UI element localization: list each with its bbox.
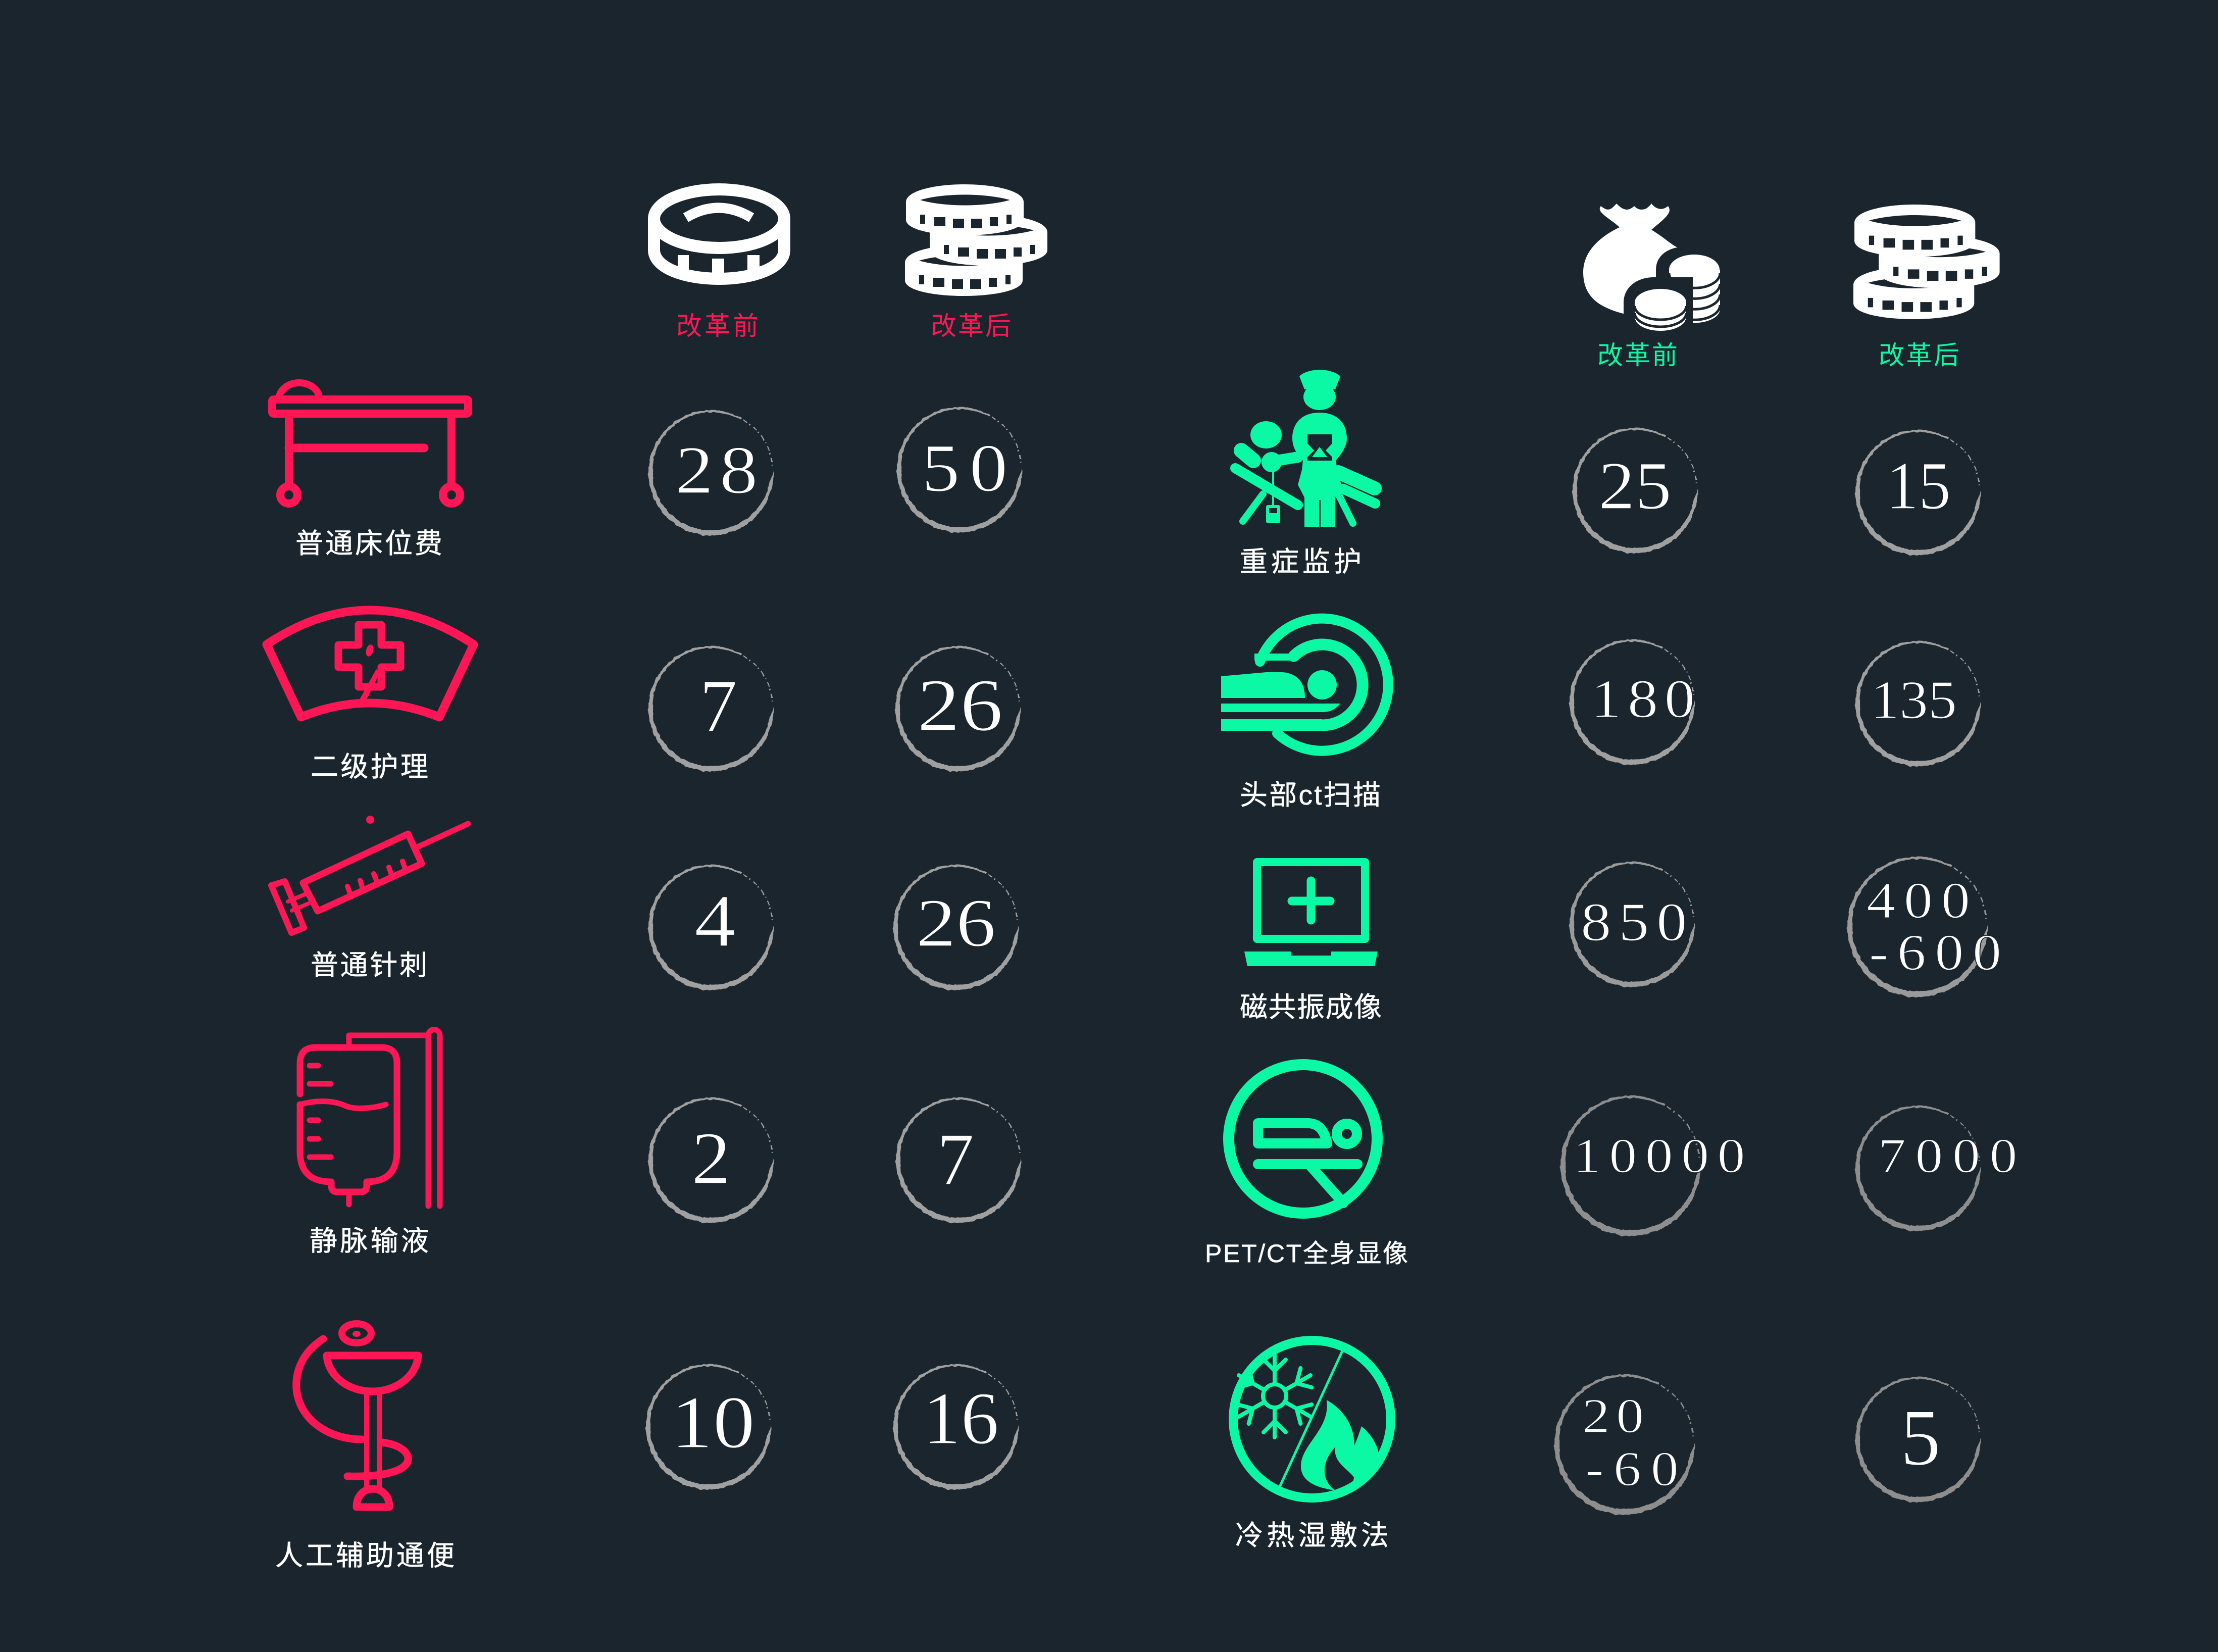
value: PET/CT after (1855, 1106, 2018, 1231)
value: head CT after: 135 (1871, 670, 1957, 730)
value: intensive care before (1573, 428, 1698, 553)
value: head CT before: 180 (1591, 669, 1695, 729)
value: intensive care before: 25 (1598, 448, 1672, 524)
icon: nurse with patient (1235, 370, 1375, 528)
value: infusion after: 7 (937, 1118, 974, 1201)
icon: money bag and coins (1583, 204, 1727, 334)
value: injection before (648, 865, 774, 990)
value: PET/CT before (1560, 1095, 1745, 1236)
value: injection after (893, 865, 1019, 990)
value: defecation before (646, 1364, 771, 1489)
value: head CT before (1570, 639, 1695, 765)
icon: nurse cap (267, 610, 474, 717)
value: intensive care after: 15 (1886, 448, 1951, 524)
value: head CT after (1855, 641, 1981, 766)
value: injection before: 4 (694, 880, 736, 963)
label: intensive care: 重症监护 (1240, 546, 1362, 577)
label: head CT scan: 头部ct扫描 (1240, 779, 1381, 811)
value: compress before: 20 (1582, 1388, 1644, 1443)
value: nursing before: 7 (699, 664, 737, 748)
icon: bowl with snake (296, 1324, 418, 1507)
icon: laptop with medical cross (1244, 862, 1378, 966)
label: injection: 普通针刺 (311, 949, 427, 981)
heading: before reform, red: 改革前 (676, 312, 759, 340)
value: bed fee after (897, 407, 1022, 532)
value: infusion before (648, 1097, 774, 1223)
icon: hot and cold compress (1233, 1340, 1391, 1498)
label: assisted defecation: 人工辅助通便 (275, 1540, 455, 1571)
value: MRI after: -600 (1869, 925, 2001, 981)
value: MRI after: 400 (1867, 873, 1970, 929)
value: compress after (1855, 1377, 1981, 1502)
value: infusion before: 2 (691, 1117, 731, 1200)
value: intensive care after (1855, 430, 1981, 555)
label: PET/CT full body: PET/CT全身显像 (1205, 1239, 1408, 1268)
value: MRI before (1570, 862, 1695, 987)
value: PET/CT after: 7000 (1878, 1128, 2018, 1183)
value: infusion after (896, 1097, 1021, 1223)
value: compress before (1554, 1374, 1695, 1515)
value: injection after: 26 (916, 885, 996, 961)
heading: after reform, green: 改革后 (1879, 341, 1959, 370)
value: compress after: 5 (1900, 1392, 1941, 1482)
value: PET/CT before: 10000 (1573, 1128, 1745, 1183)
value: nursing after (895, 646, 1021, 771)
icon: IV drip bag (300, 1030, 440, 1206)
heading: after reform, red: 改革后 (931, 312, 1011, 340)
value: bed fee before: 28 (675, 432, 758, 508)
value: MRI before: 850 (1581, 892, 1687, 953)
value: bed fee before (648, 410, 774, 535)
value: compress before: -60 (1585, 1441, 1679, 1496)
value: defecation after (893, 1364, 1019, 1489)
icon: coin stack (905, 184, 1047, 296)
icon: CT scanner (1221, 619, 1388, 751)
icon: single coin (654, 189, 784, 279)
heading: before reform, green: 改革前 (1597, 341, 1678, 370)
value: defecation before: 10 (671, 1381, 755, 1464)
icon: syringe (271, 816, 468, 933)
icon: PET/CT scanner (1229, 1065, 1377, 1213)
value: bed fee after: 50 (922, 430, 1007, 506)
icon: coin stack, green column (1853, 205, 2000, 319)
label: secondary nursing: 二级护理 (311, 751, 428, 782)
value: defecation after: 16 (923, 1377, 999, 1460)
label: hot and cold compress: 冷热湿敷法 (1235, 1520, 1389, 1551)
value: nursing before (648, 646, 774, 771)
value: MRI after (1847, 857, 2001, 997)
icon: hospital bed (272, 383, 468, 504)
value: nursing after: 26 (917, 664, 1003, 747)
label: bed fee: 普通床位费 (295, 528, 442, 559)
label: MRI: 磁共振成像 (1240, 991, 1382, 1023)
label: IV infusion: 静脉输液 (310, 1225, 429, 1257)
